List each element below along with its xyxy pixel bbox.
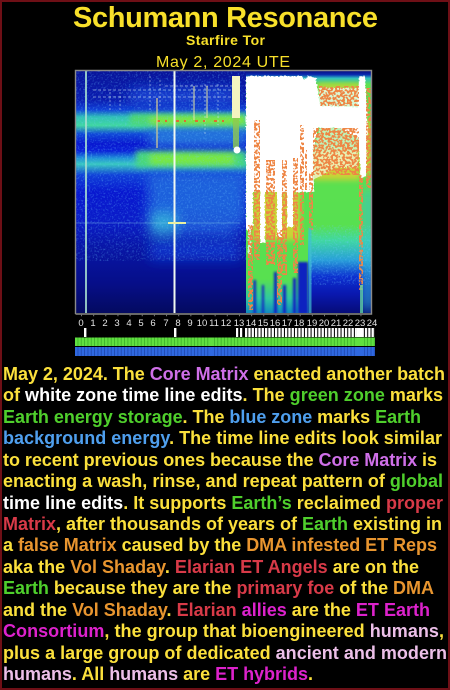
body text block: plus a large group of dedicated ancient and modern <box>3 643 447 663</box>
body text block: Matrix, after thousands of years of Earth existing in <box>3 514 442 534</box>
body text block: time line edits. It supports Earth’s reclaimed proper <box>3 493 443 513</box>
body text block: and the Vol Shaday. Elarian allies are the ET Earth <box>3 600 430 620</box>
vertical burst lines <box>85 71 87 313</box>
body text block: a false Matrix caused by the DMA infested ET Reps <box>3 535 437 555</box>
green base of streak columns <box>246 228 308 313</box>
axis tick marks <box>81 314 372 316</box>
hour axis labels: 24 <box>367 318 377 329</box>
body text block: aka the Vol Shaday. Elarian ET Angels are on the <box>3 557 419 577</box>
left spectrogram background <box>76 71 246 313</box>
subtitle: author: Starfire Tor <box>186 32 266 48</box>
white zone time-line edits <box>246 76 368 255</box>
body text block: Consortium, the group that bioengineered humans, <box>3 621 444 641</box>
hour axis labels: 16 <box>270 318 280 329</box>
hour axis labels: 1 <box>90 318 96 329</box>
date heading: May 2, 2024 UTE <box>156 54 290 71</box>
body text block <box>3 364 447 684</box>
chart frame <box>76 70 372 314</box>
body text block: Earth because they are the primary foe of the DMA <box>3 578 434 598</box>
white zone indicator bar <box>84 328 375 337</box>
title: Schumann Resonance <box>73 2 378 34</box>
body text block: enacting a wash, rinse, and repeat pattern of global <box>3 471 443 491</box>
hour axis labels: 21 <box>331 318 341 329</box>
hour axis labels: 17 <box>282 318 292 329</box>
hour axis labels: 23 <box>355 318 365 329</box>
green zone indicator bar <box>75 338 375 346</box>
hour axis labels: 22 <box>343 318 353 329</box>
hour axis labels: 8 <box>175 318 181 329</box>
body text block: May 2, 2024. The Core Matrix enacted another batch <box>3 364 445 384</box>
body text block: Earth energy storage. The blue zone marks Earth <box>3 407 421 427</box>
hour axis labels: 9 <box>187 318 193 329</box>
hour axis labels: 3 <box>114 318 120 329</box>
body text block: background energy. The time line edits look similar <box>3 428 442 448</box>
hour axis labels: 6 <box>150 318 156 329</box>
body text block: humans. All humans are ET hybrids. <box>3 664 313 684</box>
mixed white within red-speckled regions <box>313 88 359 180</box>
hour axis labels: 4 <box>126 318 132 329</box>
hour axis labels: 5 <box>138 318 144 329</box>
right spectrogram background <box>246 71 371 313</box>
blue zone indicator bar <box>75 347 375 356</box>
hour axis labels: 18 <box>294 318 304 329</box>
hour axis labels: 12 <box>221 318 231 329</box>
hour axis labels: 15 <box>258 318 268 329</box>
upper-band interference lines <box>93 76 240 135</box>
hour axis labels: 14 <box>246 318 256 329</box>
yellow fringe beneath red zones <box>252 84 371 240</box>
hour axis labels: 11 <box>209 318 219 329</box>
hour axis labels: 2 <box>102 318 108 329</box>
body text block: to recent previous ones because the Core Matrix is <box>3 450 437 470</box>
hour axis labels: 10 <box>197 318 207 329</box>
cyan streak at hour 18.800 <box>308 228 312 313</box>
spectrogram chart <box>76 70 372 316</box>
hour axis labels: 7 <box>163 318 169 329</box>
body text block: of white zone time line edits. The green zone marks <box>3 385 443 405</box>
hour axis labels: 19 <box>307 318 317 329</box>
hour axis labels: 20 <box>319 318 329 329</box>
red speckle regions <box>248 86 371 310</box>
hour axis labels: 0 <box>78 318 84 329</box>
gaps between lower streak columns <box>254 262 308 314</box>
speckle texture <box>76 71 246 261</box>
hour axis labels <box>78 318 377 329</box>
hour axis labels: 13 <box>234 318 244 329</box>
